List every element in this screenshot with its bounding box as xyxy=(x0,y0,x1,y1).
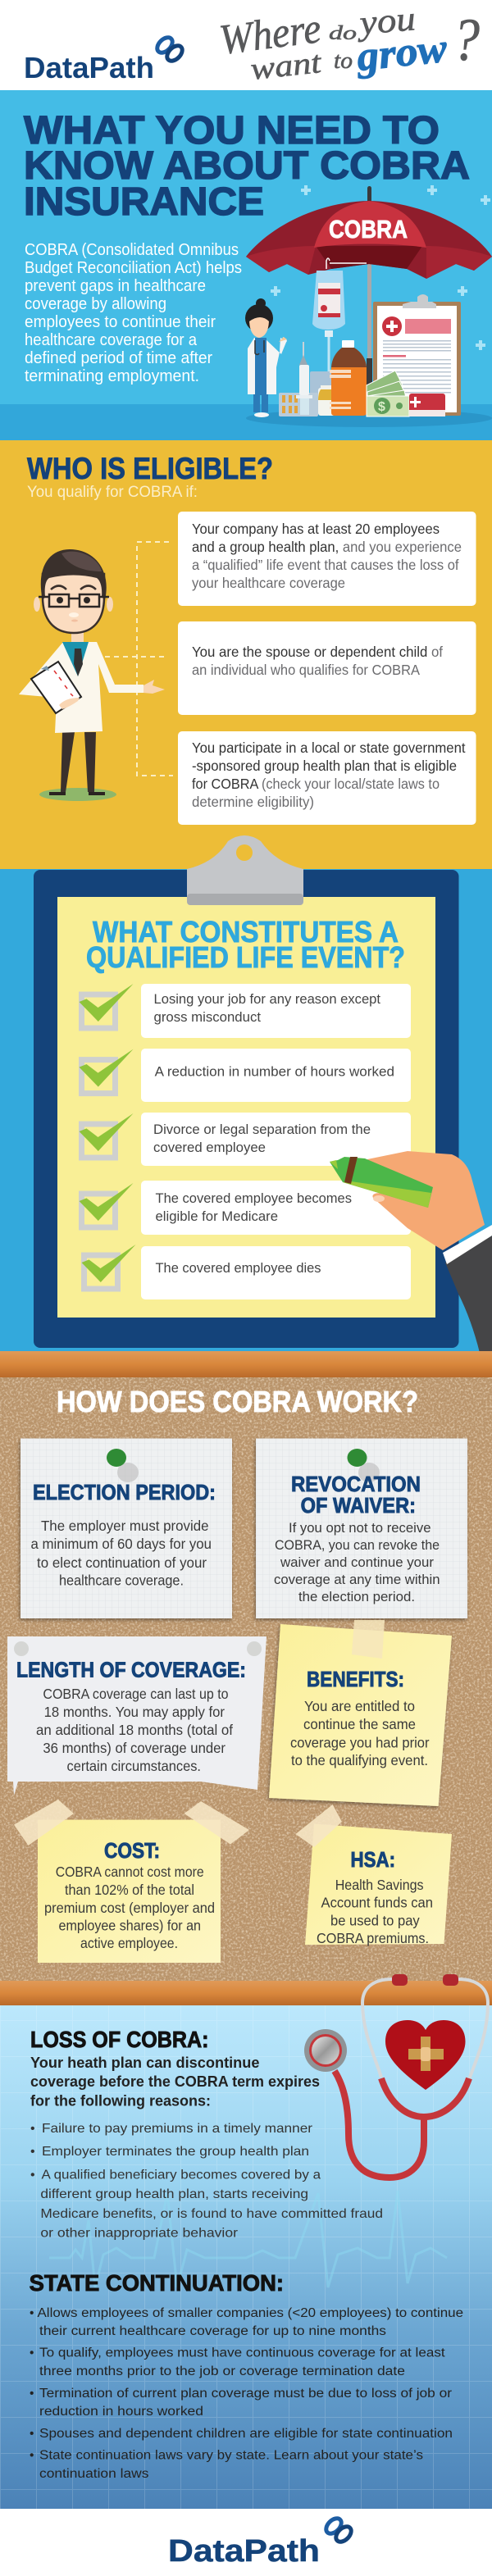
note: revocation of waiver: the election period. xyxy=(298,1589,415,1604)
text: loss of COBRA: A qualified beneficiary becomes covered by a xyxy=(41,2168,321,2182)
heading: WHO IS ELIGIBLE? xyxy=(27,452,273,485)
checklist row 1: Losing your job for any reason except xyxy=(154,991,380,1007)
intro text: coverage by allowing xyxy=(25,295,166,313)
checklist row 2: A reduction in number of hours worked xyxy=(155,1064,394,1079)
title: KNOW ABOUT COBRA xyxy=(24,144,470,188)
text: loss of COBRA: for the following reasons: xyxy=(30,2092,211,2109)
illustration: doctor with clipboard xyxy=(19,549,165,801)
tagline: where do you want to grow: to xyxy=(334,48,353,74)
note: election period xyxy=(20,1438,232,1618)
heading: HOW DOES COBRA WORK? xyxy=(57,1385,418,1418)
note: benefits: coverage you had prior xyxy=(290,1735,430,1751)
note: HSA: HSA: xyxy=(351,1847,395,1872)
checklist row 5: The covered employee dies xyxy=(156,1260,321,1276)
text: loss of COBRA: • xyxy=(30,2168,35,2182)
note: HSA: be used to pay xyxy=(330,1912,420,1928)
tagline: where do you want to grow: do xyxy=(329,23,357,44)
note: benefits xyxy=(269,1620,452,1806)
text: state continuation: • xyxy=(30,2387,34,2401)
clipboard paper xyxy=(57,897,435,1318)
panel: who is eligible xyxy=(0,440,492,869)
eligibility card 1 xyxy=(178,512,476,606)
note: HSA: COBRA premiums. xyxy=(317,1930,429,1946)
panel: header xyxy=(0,0,492,90)
eligibility card 3: -sponsored group health plan that is eligible xyxy=(192,758,457,774)
text: state continuation: State continuation laws vary by state. Learn about your state’s xyxy=(39,2449,423,2463)
note: benefits: continue the same xyxy=(303,1716,416,1732)
footer DataPath logo: DataPath xyxy=(168,2534,320,2569)
text: loss of COBRA: Employer terminates the group health plan xyxy=(42,2145,309,2159)
panel: qualified life event clipboard xyxy=(0,835,492,1353)
note: election period: The employer must provide xyxy=(41,1518,208,1534)
icon: medicine and supplies xyxy=(279,340,445,416)
icon: medical clipboard xyxy=(373,294,461,416)
note: cost: than 102% of the total xyxy=(65,1882,194,1898)
note: length of coverage: certain circumstances. xyxy=(67,1758,201,1774)
panel: footer xyxy=(0,2509,492,2576)
note: revocation of waiver xyxy=(256,1438,467,1618)
note: HSA: Account funds can xyxy=(321,1895,433,1911)
text: state continuation: Spouses and dependent children are eligible for state continuation xyxy=(39,2427,453,2441)
heading: WHAT CONSTITUTES A xyxy=(93,915,399,949)
eligibility card 1: and a group health plan, and you experience xyxy=(192,539,462,555)
decorative plus signs xyxy=(271,185,490,350)
note: revocation of waiver: COBRA, you can revoke the xyxy=(275,1537,440,1553)
heading xyxy=(86,915,405,974)
panel: loss of COBRA and state continuation xyxy=(0,1974,492,2509)
text: loss of COBRA: or other inappropriate behavior xyxy=(40,2227,239,2240)
note: cost: COBRA cannot cost more xyxy=(56,1864,204,1880)
DataPath logo: DataPath xyxy=(24,51,154,84)
text: state continuation: • xyxy=(30,2449,34,2463)
intro text: prevent gaps in healthcare xyxy=(25,277,206,295)
text: loss of COBRA: LOSS OF COBRA: xyxy=(30,2027,208,2052)
note: length of coverage: LENGTH OF COVERAGE: xyxy=(16,1658,246,1682)
note: length of coverage: COBRA coverage can last up to xyxy=(43,1686,229,1702)
text: state continuation: • xyxy=(30,2427,34,2441)
checklist row 4: eligible for Medicare xyxy=(156,1208,278,1224)
intro text: employees to continue their xyxy=(25,313,216,331)
text: loss of COBRA: coverage before the COBRA term expires xyxy=(30,2073,320,2090)
text: state continuation: their current healthcare coverage for up to nine months xyxy=(39,2324,386,2338)
note: election period: healthcare coverage. xyxy=(59,1572,184,1589)
checklist row 3: Divorce or legal separation from the xyxy=(153,1122,371,1137)
text: loss of COBRA: • xyxy=(30,2122,35,2136)
text: state continuation: Termination of current plan coverage must be due to loss of job or xyxy=(39,2387,452,2401)
note: election period: a minimum of 60 days for you xyxy=(31,1536,212,1552)
note: cost: COST: xyxy=(104,1838,160,1863)
checklist row 5 xyxy=(82,1245,411,1299)
footer DataPath logo xyxy=(168,2515,354,2569)
intro text: COBRA (Consolidated Omnibus xyxy=(25,241,239,259)
heartbeat line xyxy=(49,2191,447,2287)
title xyxy=(24,109,470,224)
note: revocation of waiver: coverage at any time within xyxy=(274,1572,440,1587)
subheading: You qualify for COBRA if: xyxy=(27,484,198,501)
text: state continuation: STATE CONTINUATION: xyxy=(30,2270,284,2296)
panel: hero introduction xyxy=(0,90,492,440)
dashed connectors xyxy=(105,542,173,776)
note: election period: to elect continuation of your xyxy=(37,1554,207,1571)
tagline: where do you want to grow: want xyxy=(249,45,324,87)
note: cost: employee shares) for an xyxy=(59,1917,201,1933)
icon: red COBRA umbrella xyxy=(246,186,492,385)
note: cost: premium cost (employer and xyxy=(44,1900,215,1916)
text: state continuation: Allows employees of smaller companies (<20 employees) to continue xyxy=(38,2306,463,2320)
text: state continuation: • xyxy=(30,2346,34,2360)
tagline: where do you want to grow: Where xyxy=(217,5,324,64)
tagline: where do you want to grow: ? xyxy=(453,7,480,74)
checklist row 2 xyxy=(79,1049,411,1102)
text: state continuation: • xyxy=(30,2306,34,2320)
note: HSA: Health Savings xyxy=(335,1877,424,1893)
text: state continuation: To qualify, employees must have continuous coverage for at least xyxy=(39,2346,445,2360)
title: INSURANCE xyxy=(24,180,264,224)
text: state continuation xyxy=(30,2270,463,2481)
note: revocation of waiver: waiver and continue your xyxy=(280,1554,434,1570)
text: loss of COBRA: • xyxy=(30,2145,35,2159)
text: state continuation: reduction in hours worked xyxy=(39,2405,203,2419)
text: state continuation: three months prior to the job or coverage termination date xyxy=(39,2364,405,2378)
text: state continuation: continuation laws xyxy=(39,2467,149,2481)
note: election period: ELECTION PERIOD: xyxy=(33,1480,216,1504)
tagline: where do you want to grow: grow xyxy=(353,25,449,80)
intro text xyxy=(25,241,242,385)
intro text: terminating employment. xyxy=(25,367,199,385)
title: WHAT YOU NEED TO xyxy=(24,109,440,152)
text: loss of COBRA: Your heath plan can discontinue xyxy=(30,2055,259,2071)
panel: how does COBRA work corkboard xyxy=(0,1351,492,2005)
text: loss of COBRA: Medicare benefits, or is found to have committed fraud xyxy=(40,2207,383,2221)
eligibility card 1: your healthcare coverage xyxy=(192,575,345,591)
text: loss of COBRA xyxy=(30,2027,383,2240)
heading: QUALIFIED LIFE EVENT? xyxy=(86,940,405,974)
note: revocation of waiver: If you opt not to receive xyxy=(289,1520,431,1536)
checklist row 3: covered employee xyxy=(153,1140,266,1155)
DataPath logo xyxy=(24,34,185,84)
checklist row 4 xyxy=(79,1181,411,1235)
illustration: hand holding green marker xyxy=(330,1151,492,1353)
text: loss of COBRA: different group health plan, starts receiving xyxy=(40,2187,308,2201)
text: loss of COBRA: Failure to pay premiums in a timely manner xyxy=(42,2122,313,2136)
eligibility card 2 xyxy=(178,621,476,715)
eligibility card 1: Your company has at least 20 employees xyxy=(192,521,440,537)
intro text: Budget Reconciliation Act) helps xyxy=(25,259,242,277)
note: revocation of waiver: REVOCATION xyxy=(291,1472,421,1496)
clipboard clip xyxy=(187,835,303,905)
eligibility card 2: You are the spouse or dependent child of xyxy=(192,644,443,660)
eligibility card 1: a “qualified” life event that causes the loss of xyxy=(192,557,459,573)
clipboard board xyxy=(34,870,459,1348)
note: cost: active employee. xyxy=(80,1935,178,1951)
note: HSA xyxy=(295,1805,452,1946)
note: benefits: You are entitled to xyxy=(304,1698,415,1714)
icon: female doctor xyxy=(245,298,287,417)
checklist row 1 xyxy=(79,984,411,1038)
intro text: defined period of time after xyxy=(25,349,212,367)
eligibility card 3: for COBRA (check your local/state laws to xyxy=(192,776,440,792)
note: benefits: to the qualifying event. xyxy=(291,1752,428,1768)
icon: stethoscope with heart xyxy=(304,1974,488,2178)
checklist row 3 xyxy=(79,1113,411,1166)
icon: medicine and supplies: $ xyxy=(378,400,385,414)
eligibility card 3: determine eligibility) xyxy=(192,794,314,810)
intro text: healthcare coverage for a xyxy=(25,331,198,349)
eligibility card 2: an individual who qualifies for COBRA xyxy=(192,662,420,678)
eligibility card 3: You participate in a local or state government xyxy=(192,740,466,756)
note: revocation of waiver: OF WAIVER: xyxy=(301,1493,416,1518)
note: length of coverage xyxy=(7,1636,266,1795)
tagline: where do you want to grow xyxy=(217,0,480,87)
tagline: where do you want to grow: you xyxy=(354,0,417,43)
eligibility card 3 xyxy=(178,731,476,825)
note: length of coverage: 36 months) of coverage under xyxy=(43,1740,226,1756)
checklist row 4: The covered employee becomes xyxy=(156,1190,352,1206)
note: benefits: BENEFITS: xyxy=(307,1667,404,1691)
note: length of coverage: 18 months. You may apply for xyxy=(44,1704,225,1720)
note: length of coverage: an additional 18 months (total of xyxy=(36,1722,233,1738)
icon: IV drip bag xyxy=(312,258,367,373)
note: cost xyxy=(14,1800,249,1963)
icon: red COBRA umbrella: COBRA xyxy=(329,215,408,243)
checklist row 1: gross misconduct xyxy=(154,1009,261,1025)
